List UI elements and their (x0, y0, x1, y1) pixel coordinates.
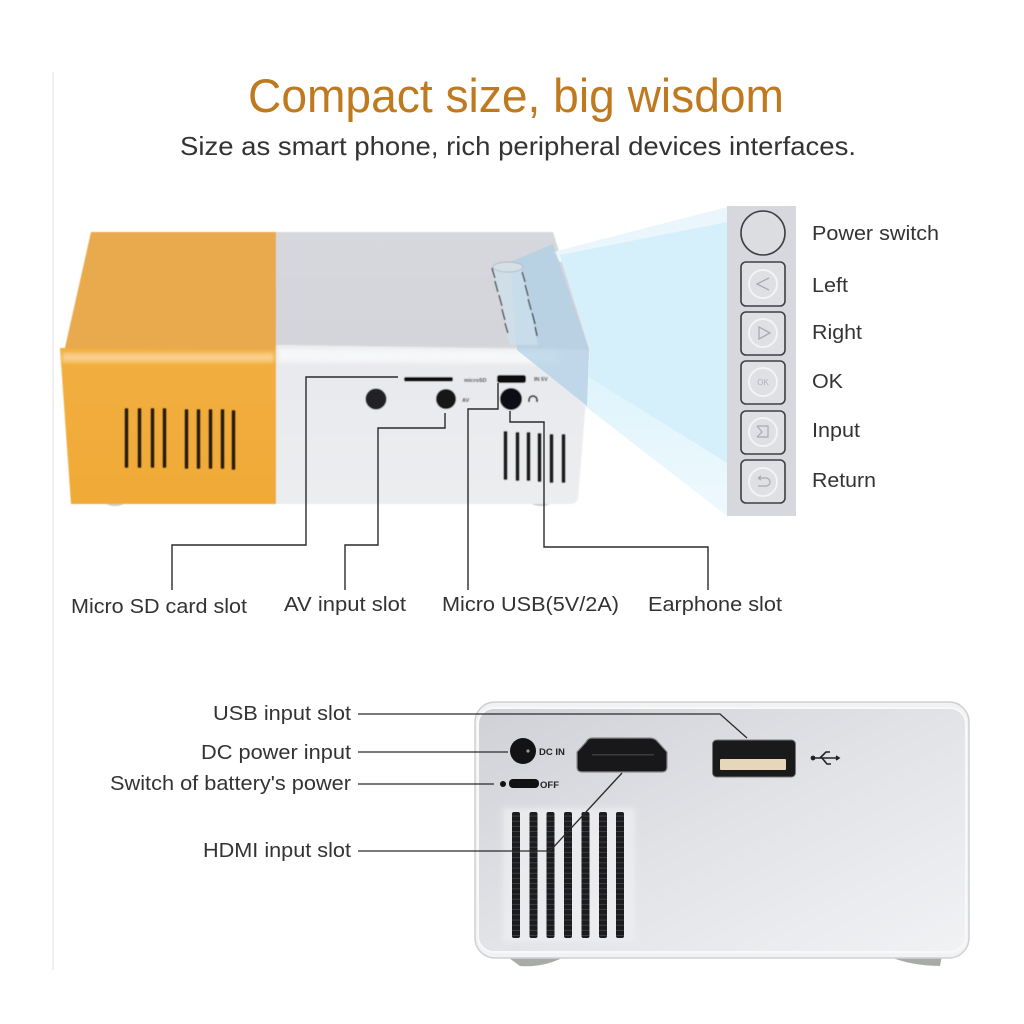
usb port (712, 740, 796, 777)
rear port labels: HDMI input slot (203, 839, 351, 862)
battery switch (500, 781, 506, 787)
front projector illustration (60, 232, 590, 506)
orange front face (60, 348, 276, 504)
orange vents (124, 408, 236, 470)
input button (741, 411, 785, 454)
leader lines: front ports (172, 377, 708, 590)
return button (741, 460, 785, 503)
rear projector illustration (475, 702, 969, 966)
page edge line (52, 72, 54, 970)
button labels (812, 222, 939, 492)
dc port (510, 738, 536, 764)
orange top face (64, 232, 276, 352)
rear port labels: USB input slot (213, 702, 351, 725)
front port labels (71, 593, 782, 618)
rear projector illustration: DC IN (539, 747, 565, 758)
front port labels: AV input slot (284, 593, 406, 616)
rear body (475, 702, 969, 958)
rear projector illustration: OFF (540, 780, 559, 791)
right button (741, 312, 785, 355)
button panel (727, 206, 796, 516)
button labels: Input (812, 419, 860, 442)
ok button: OK (757, 378, 769, 387)
silver vents (504, 431, 566, 483)
front projector illustration: IN 5V (534, 377, 548, 383)
button labels: Right (812, 321, 862, 344)
headphone glyph (529, 396, 537, 402)
button labels: OK (812, 370, 843, 393)
rear port labels: Switch of battery's power (110, 772, 351, 795)
rear vents (512, 812, 624, 938)
front port labels: Micro USB(5V/2A) (442, 593, 619, 616)
usb symbol (811, 752, 839, 764)
front port labels: Earphone slot (648, 593, 782, 616)
subtitle: Size as smart phone, rich peripheral devices interfaces. (180, 131, 856, 161)
silver top face (276, 232, 590, 350)
fold highlight: orange (62, 353, 274, 362)
vent panel highlight (503, 808, 635, 942)
power button (741, 211, 785, 255)
ports (366, 388, 386, 410)
button labels: Left (812, 274, 848, 297)
fold highlight: silver (278, 348, 560, 364)
projection beam (510, 207, 727, 516)
front projector illustration: AV (462, 398, 470, 404)
rear port labels (110, 702, 351, 862)
hdmi port (577, 738, 667, 772)
ok button (741, 361, 785, 404)
rear leader lines (358, 714, 747, 851)
feet (106, 504, 550, 506)
left button (741, 262, 785, 306)
small port captions: microSD (464, 378, 487, 384)
top keypad (492, 262, 538, 345)
button labels: Power switch (812, 222, 939, 245)
rear port labels: DC power input (201, 741, 351, 764)
button labels: Return (812, 469, 876, 492)
front port labels: Micro SD card slot (71, 595, 247, 618)
rear feet (505, 955, 942, 966)
title: Compact size, big wisdom (248, 69, 784, 122)
silver front face (276, 345, 590, 504)
